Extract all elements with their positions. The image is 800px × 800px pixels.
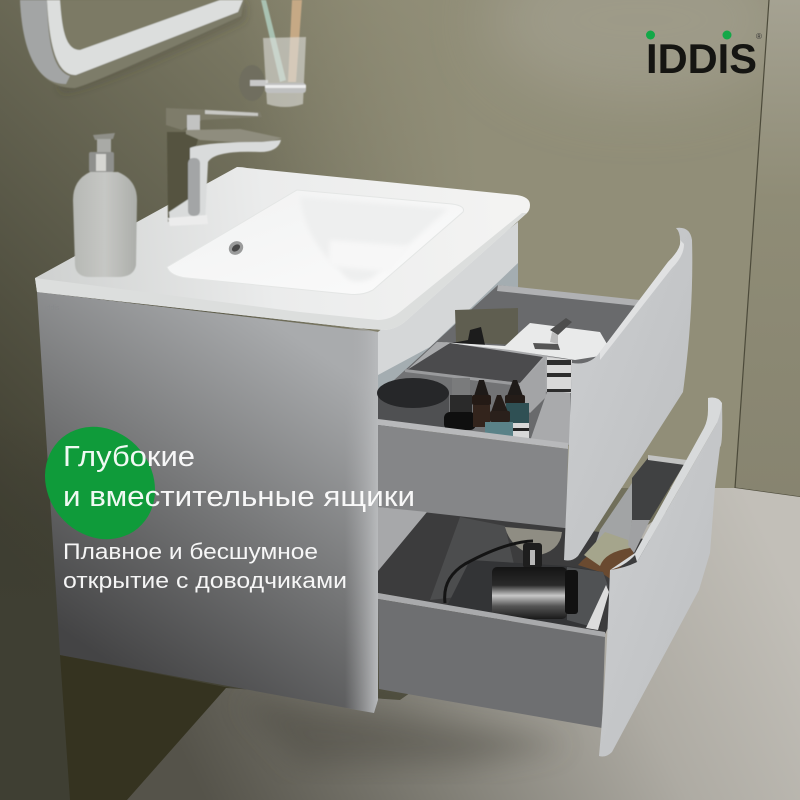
heading: Глубокие bbox=[63, 441, 195, 473]
cabinet top side strip bbox=[378, 222, 518, 400]
green circle bbox=[22, 404, 178, 562]
upper drawer front panel bbox=[564, 228, 692, 560]
towel bbox=[445, 560, 609, 630]
wall panel on the right bbox=[735, 0, 800, 497]
siphon bbox=[505, 527, 562, 556]
upper drawer rim bbox=[378, 419, 568, 449]
subheading bbox=[63, 539, 347, 593]
wall mirror bbox=[20, 0, 245, 92]
soap dispenser bbox=[73, 133, 137, 277]
subheading: открытие с доводчиками bbox=[63, 568, 347, 593]
siphon behind drawer bbox=[590, 483, 632, 560]
lower drawer side bbox=[378, 599, 605, 728]
wall section right of the cabinet bbox=[240, 0, 790, 488]
lower drawer front panel bbox=[599, 398, 722, 756]
logo: ® bbox=[756, 32, 762, 41]
floor bbox=[127, 488, 800, 800]
subheading: Плавное и бесшумное bbox=[63, 539, 318, 564]
cabinet body: iddis bbox=[45, 305, 60, 312]
upper drawer bbox=[377, 285, 640, 532]
shadow on floor under cabinet bbox=[240, 700, 570, 765]
hair dryer bbox=[445, 541, 578, 619]
lower drawer far interior bbox=[628, 455, 687, 553]
faucet bbox=[166, 108, 282, 226]
upper drawer interior bbox=[378, 285, 640, 448]
cabinet body bbox=[37, 292, 378, 713]
upper drawer side bbox=[378, 425, 568, 532]
drain overflow bbox=[226, 238, 246, 258]
heading bbox=[63, 441, 415, 513]
washbasin bbox=[35, 167, 530, 330]
heading: и вместительные ящики bbox=[63, 481, 415, 513]
light drawer floor bbox=[407, 342, 570, 445]
cabinet opening below upper drawer bbox=[378, 483, 650, 728]
bottles bbox=[444, 378, 529, 438]
soap tray with dispenser bbox=[452, 308, 518, 345]
lower drawer rim bbox=[378, 593, 605, 637]
brush bbox=[578, 532, 634, 580]
sink bowl bbox=[167, 190, 464, 294]
dark wall under cabinet bbox=[0, 420, 230, 800]
toothbrush glass bbox=[239, 0, 306, 107]
towels and razor bbox=[437, 318, 607, 393]
jar bbox=[377, 378, 449, 427]
logo: IDDIS bbox=[646, 35, 757, 82]
organiser tray bbox=[380, 343, 546, 440]
